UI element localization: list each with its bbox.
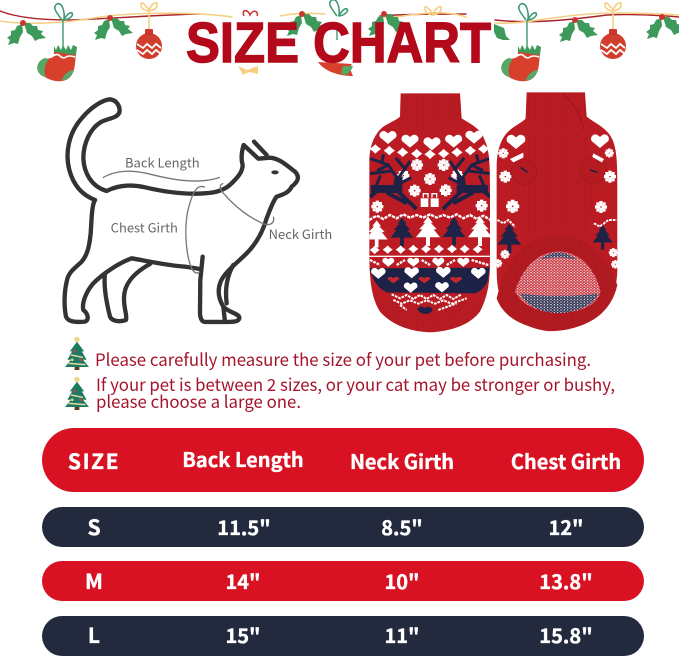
icon: christmas tree 2 bbox=[65, 377, 89, 410]
stockings bbox=[37, 0, 541, 81]
measure lines bbox=[103, 171, 274, 273]
diamonds row bbox=[370, 144, 489, 159]
navy band bbox=[369, 267, 490, 293]
row S: S bbox=[87, 512, 101, 542]
row S: 11.5" bbox=[217, 512, 271, 541]
chest girth label: Chest Girth bbox=[111, 218, 178, 237]
note lines 2 and 3 bbox=[96, 371, 615, 413]
garland decoration bbox=[0, 0, 679, 81]
gift bbox=[421, 194, 439, 207]
row S bbox=[42, 507, 644, 547]
note line 1: Please carefully measure the size of your pet before purchasing. bbox=[95, 346, 591, 371]
row S: 8.5" bbox=[381, 512, 423, 541]
sweater front bbox=[366, 92, 493, 333]
side patterns bbox=[494, 134, 620, 269]
lower zigzag bbox=[392, 294, 467, 310]
small diamonds row bbox=[370, 245, 483, 254]
hearts row bbox=[379, 131, 483, 150]
back length label: Back Length bbox=[125, 153, 200, 172]
row M: 14" bbox=[225, 566, 261, 595]
cat measurement diagram bbox=[65, 99, 332, 322]
notes bbox=[65, 337, 615, 413]
reindeer bbox=[372, 156, 489, 208]
table header row: Neck Girth bbox=[350, 446, 454, 475]
note lines 2 and 3: please choose a large one. bbox=[96, 388, 301, 413]
garland strings bbox=[0, 11, 679, 23]
hem rib and inner knit bbox=[497, 235, 617, 330]
row M: 10" bbox=[384, 566, 420, 595]
row L: 11" bbox=[384, 620, 420, 649]
row L bbox=[42, 616, 644, 656]
sweater product photo bbox=[366, 92, 620, 333]
icon: christmas tree 1 bbox=[65, 337, 89, 370]
row L: 15.8" bbox=[539, 620, 593, 649]
row L: L bbox=[88, 620, 100, 650]
row S: 12" bbox=[548, 512, 584, 541]
snowflakes bbox=[371, 159, 488, 213]
neck girth label: Neck Girth bbox=[269, 224, 332, 243]
table header row: SIZE bbox=[68, 446, 120, 476]
baubles bbox=[136, 3, 626, 59]
row L: 15" bbox=[225, 620, 261, 649]
row M bbox=[42, 561, 644, 601]
title: SIZE CHART bbox=[186, 11, 491, 75]
table header row: Back Length bbox=[182, 444, 304, 473]
holly sprigs bbox=[7, 11, 679, 45]
row M: M bbox=[85, 566, 103, 596]
sweater back bbox=[494, 92, 620, 331]
table header row: Chest Girth bbox=[511, 446, 621, 475]
small bows bbox=[238, 11, 258, 75]
zigzag band bbox=[369, 214, 491, 220]
tree row bbox=[366, 216, 492, 248]
note lines 2 and 3: If your pet is between 2 sizes, or your cat may be stronger or bushy, bbox=[96, 371, 615, 396]
armhole rosettes bbox=[511, 157, 607, 184]
small hearts row bbox=[370, 258, 488, 267]
size table bbox=[42, 428, 644, 656]
cat outline bbox=[65, 99, 298, 322]
row M: 13.8" bbox=[539, 566, 593, 595]
table header row bbox=[42, 428, 644, 492]
cat eye bbox=[271, 170, 279, 174]
